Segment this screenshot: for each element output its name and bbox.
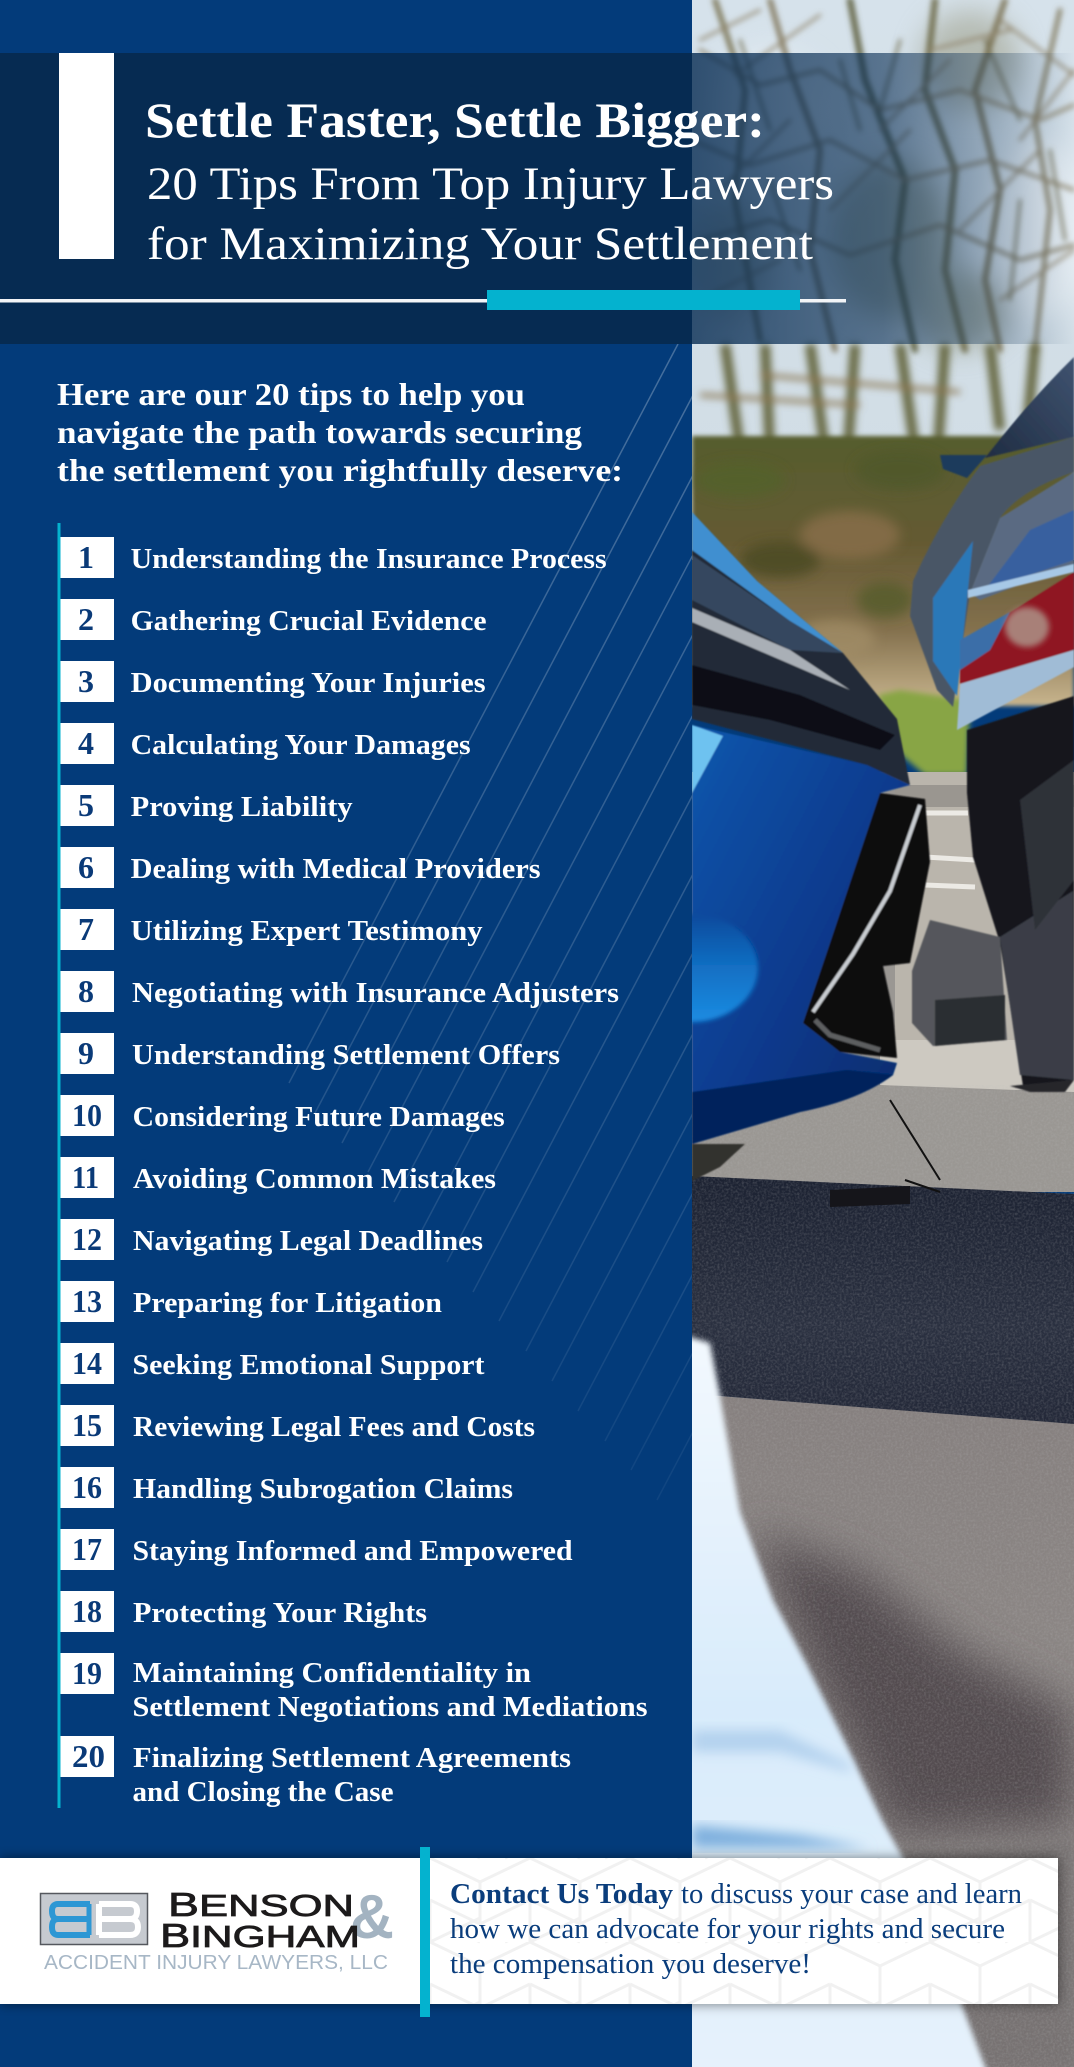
logo wordmark: B ENSON	[168, 1886, 354, 1923]
tip 18: Protecting Your Rights	[133, 1597, 427, 1629]
tip 17: Staying Informed and Empowered	[132, 1535, 572, 1567]
tip 18: 18	[72, 1593, 102, 1629]
tip 16	[60, 1467, 513, 1508]
tip 1: 1	[78, 539, 94, 575]
tip 6: Dealing with Medical Providers	[131, 853, 541, 885]
title: 20 Tips From Top Injury Lawyers	[147, 158, 834, 210]
left navy panel	[0, 0, 692, 2067]
sky with blurred trees	[690, 0, 1074, 560]
blue car	[692, 512, 931, 1181]
call to action text: the compensation you deserve!	[450, 1948, 811, 1980]
title: Settle Faster, Settle Bigger:	[145, 92, 765, 148]
dark car	[910, 357, 1074, 1092]
teal divider	[420, 1847, 430, 2017]
tip 9: 9	[78, 1035, 94, 1071]
footer card	[0, 1847, 1058, 2017]
logo wordmark: B INGHAM	[160, 1917, 360, 1954]
tips list	[58, 523, 648, 1808]
tip 12	[60, 1219, 483, 1260]
tip 4: Calculating Your Damages	[131, 729, 471, 761]
tip 14: Seeking Emotional Support	[132, 1349, 485, 1381]
tip 11	[60, 1157, 496, 1198]
tip 3	[60, 661, 486, 702]
tip 5: 5	[78, 787, 94, 823]
road and shadow	[692, 772, 1074, 2067]
tip 19: Maintaining Confidentiality in	[133, 1657, 531, 1689]
tip 2: Gathering Crucial Evidence	[131, 605, 487, 637]
tip 7: Utilizing Expert Testimony	[131, 915, 483, 947]
tip 9: Understanding Settlement Offers	[132, 1039, 560, 1071]
call to action text: to discuss your case and learn	[681, 1878, 1022, 1910]
tip 5	[60, 785, 353, 826]
tip 10	[60, 1095, 505, 1136]
tip 17	[60, 1529, 572, 1570]
intro text: navigate the path towards securing	[57, 414, 582, 450]
intro text	[57, 376, 623, 488]
tip 13: Preparing for Litigation	[133, 1287, 442, 1319]
title: for Maximizing Your Settlement	[147, 218, 813, 270]
tip 20	[60, 1736, 571, 1808]
tip 15: Reviewing Legal Fees and Costs	[133, 1411, 535, 1443]
tip 16: 16	[72, 1469, 102, 1505]
tip 20: and Closing the Case	[132, 1776, 394, 1808]
tip 10: Considering Future Damages	[133, 1101, 505, 1133]
tip 14: 14	[72, 1345, 102, 1381]
tip 11: 11	[72, 1159, 99, 1195]
tip 8: Negotiating with Insurance Adjusters	[132, 977, 619, 1009]
tip 6: 6	[78, 849, 94, 885]
decorative diagonal lines	[288, 344, 692, 1500]
tip 2: 2	[78, 601, 94, 637]
tip 9	[60, 1033, 560, 1074]
tip 19: Settlement Negotiations and Mediations	[132, 1691, 648, 1723]
tip 19	[60, 1653, 648, 1723]
call to action text	[450, 1878, 1022, 1980]
tip 1	[60, 537, 607, 578]
logo	[40, 1883, 394, 1974]
tip 10: 10	[72, 1097, 102, 1133]
tip 12: Navigating Legal Deadlines	[133, 1225, 483, 1257]
header band	[0, 53, 1074, 344]
title accent block	[59, 53, 114, 259]
tip 13	[60, 1281, 442, 1322]
tip 5: Proving Liability	[131, 791, 353, 823]
tip 20: 20	[72, 1738, 105, 1774]
tip 17: 17	[72, 1531, 102, 1567]
tip 8: 8	[78, 973, 94, 1009]
logo mark	[40, 1894, 148, 1944]
call to action text: Contact Us Today	[450, 1878, 673, 1910]
tip 16: Handling Subrogation Claims	[133, 1473, 513, 1505]
tip 11: Avoiding Common Mistakes	[133, 1163, 496, 1195]
title	[145, 92, 834, 270]
tip 7: 7	[78, 911, 94, 947]
tip 12: 12	[72, 1221, 102, 1257]
background photo: car crash scene	[692, 0, 1074, 2067]
tip 6	[60, 847, 541, 888]
tip 4	[60, 723, 471, 764]
hedge and grass	[692, 436, 1074, 775]
tip 20: Finalizing Settlement Agreements	[133, 1742, 571, 1774]
grille	[803, 793, 930, 1058]
intro text: Here are our 20 tips to help you	[57, 376, 525, 412]
title divider	[0, 290, 846, 310]
tip 4: 4	[78, 725, 94, 761]
logo tagline: ACCIDENT INJURY LAWYERS, LLC	[44, 1952, 388, 1974]
tip 15	[60, 1405, 535, 1446]
tip 13: 13	[72, 1283, 102, 1319]
logo ampersand: &	[350, 1883, 394, 1952]
logo wordmark	[160, 1886, 360, 1954]
tip 2	[60, 599, 487, 640]
foreground blurred shirt	[680, 1334, 990, 2067]
call to action text: how we can advocate for your rights and secure	[450, 1913, 1005, 1945]
tip 19: 19	[72, 1655, 102, 1691]
tip 1: Understanding the Insurance Process	[131, 543, 607, 575]
tip 15: 15	[72, 1407, 102, 1443]
intro text: the settlement you rightfully deserve:	[57, 452, 623, 488]
tip 14	[60, 1343, 485, 1384]
tip 18	[60, 1591, 427, 1632]
tip 8	[60, 971, 619, 1012]
tip 3: 3	[78, 663, 94, 699]
tip 7	[60, 909, 483, 950]
tip 3: Documenting Your Injuries	[131, 667, 486, 699]
